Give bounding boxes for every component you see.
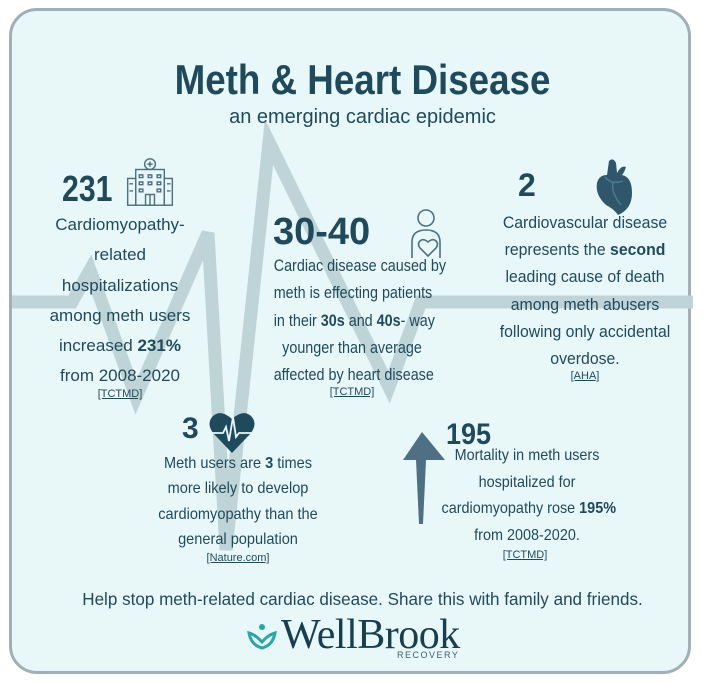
icon: up arrow [403,432,445,524]
number 231: 231 [62,168,112,209]
source: [TCTMD] [330,386,374,398]
panel: 3 stat [158,412,318,564]
text: cardiomyopathy rose 195% [442,500,616,517]
number 2: 2 [518,167,536,203]
text: from 2008-2020 [60,366,180,385]
text: meth is effecting patients [274,284,432,302]
number 195: 195 [446,418,491,451]
icon: person with heart [411,209,441,258]
panel: 2 stat [500,159,670,382]
text: increased 231% [59,336,181,355]
icon: heart with pulse [210,413,254,453]
source: [TCTMD] [98,388,142,400]
text [274,257,446,384]
text: related [94,245,146,264]
text [50,215,190,385]
text: from 2008-2020. [474,527,580,544]
wordmark: WellBrook [281,612,460,658]
panel: 30-40 stat [273,209,446,398]
text: among meth abusers [511,295,659,314]
text [500,213,670,368]
panel: 195 stat [442,418,616,561]
text: in their 30s and 40s- way [274,312,435,330]
text: among meth users [50,306,190,325]
number 30-40: 30-40 [273,211,370,253]
source: [TCTMD] [503,549,547,561]
icon: anatomical heart [596,159,632,215]
number 3: 3 [182,412,199,445]
text: more likely to develop [168,480,308,497]
text: younger than average [282,339,422,357]
text: cardiomyopathy than the [158,506,318,523]
title: Meth & Heart Disease [175,56,550,103]
panel: 231 stat [50,158,190,400]
text: leading cause of death [505,267,665,286]
text: hospitalizations [62,276,178,295]
icon: lotus [247,624,277,650]
text: Cardiac disease caused by [274,257,446,275]
source: [AHA] [571,370,599,382]
text: following only accidental [500,322,670,341]
text: Cardiovascular disease [503,213,667,232]
subtext: RECOVERY [397,650,459,660]
text [158,455,318,548]
text: hospitalized for [479,474,575,491]
subtitle: an emerging cardiac epidemic [229,106,496,128]
text: affected by heart disease [274,366,434,384]
text: Meth users are 3 times [164,455,312,472]
footer text: Help stop meth-related cardiac disease. Share this with family and friends. [82,589,643,609]
text: general population [178,531,298,548]
icon: hospital [126,158,174,206]
text: represents the second [505,240,665,259]
text: Mortality in meth users [455,447,599,464]
text: overdose. [550,349,620,368]
source: [Nature.com] [207,552,269,564]
text: Cardiomyopathy- [55,215,185,234]
text [442,447,616,544]
logo: WellBrook Recovery [247,612,460,660]
